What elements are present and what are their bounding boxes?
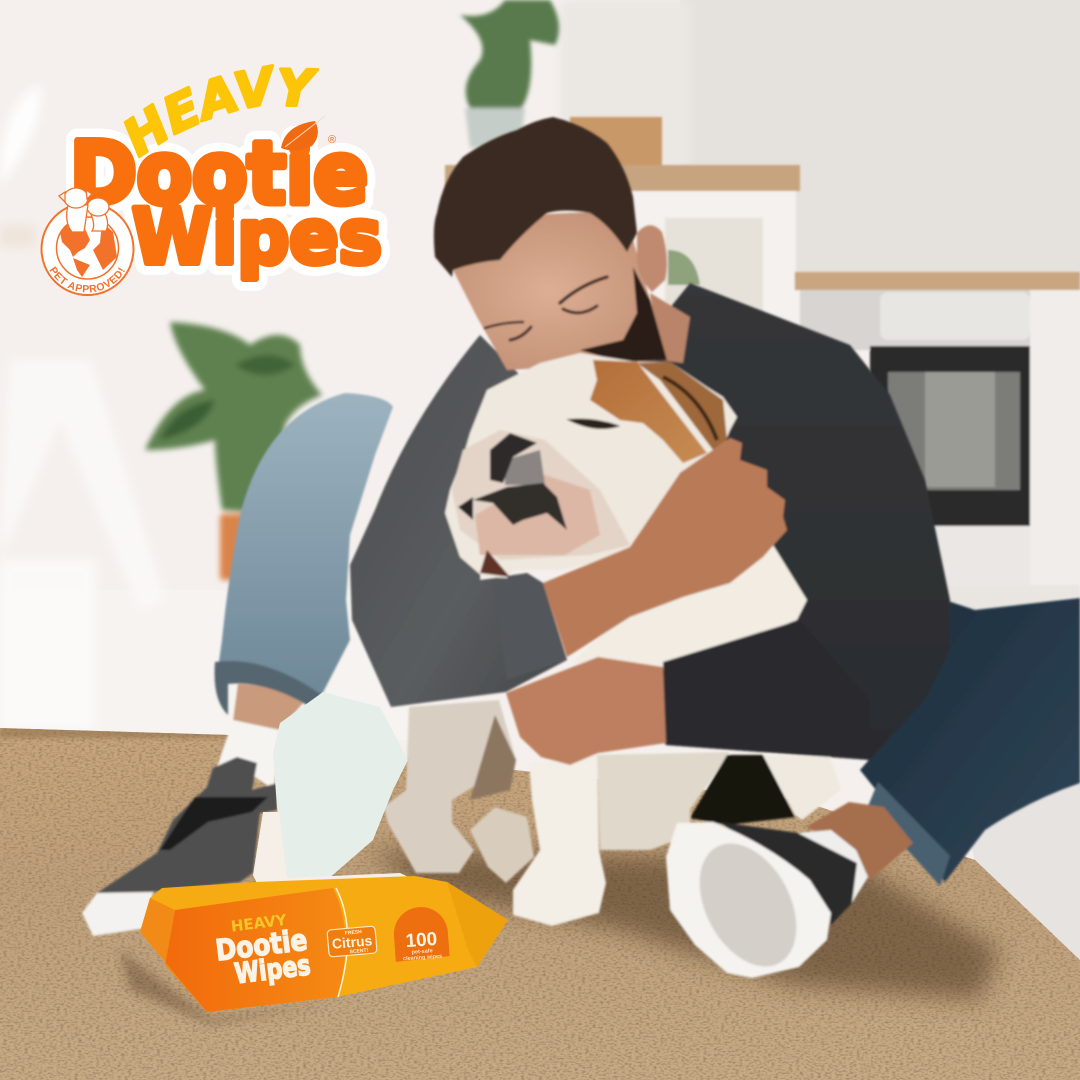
dog: second paw <box>470 807 534 883</box>
product: citrus badge: FRESH <box>345 929 362 937</box>
dog: ear <box>637 362 727 450</box>
product: package body <box>140 876 508 1012</box>
dog: nose <box>490 433 537 483</box>
logo: globe continents <box>60 222 117 277</box>
man: lower hand on dog chest <box>506 657 666 765</box>
man: face <box>453 212 667 370</box>
product: citrus badge: Citrus <box>331 932 373 952</box>
man: beard <box>580 267 667 362</box>
product: logo on pack: Wipes <box>233 948 312 990</box>
logo: cartoon pets on globe <box>59 188 109 232</box>
background: wooden shelf and white cupboard <box>445 117 800 315</box>
man: right shin and sock <box>798 802 913 903</box>
logo: word Heavy: HEAVY <box>124 64 320 158</box>
man: right jeans leg <box>860 598 1080 886</box>
dog: dark gap <box>690 755 795 825</box>
dog: muzzle <box>452 430 630 560</box>
rug <box>0 720 1080 1080</box>
man: hand hugging dog head <box>543 438 787 657</box>
product: divider line <box>336 888 348 997</box>
dog: pink cheek <box>475 475 600 555</box>
product: wipes package <box>120 812 508 1024</box>
man: ear <box>637 225 667 292</box>
dog: head <box>445 353 737 578</box>
shadow under man and dog on rug <box>370 850 1000 1000</box>
shoe: left sneaker <box>82 757 277 936</box>
product: logo on pack: Dootie <box>214 923 309 968</box>
logo: badge caption: PET APPROVED! <box>50 266 125 292</box>
logo: white outline backing: Dootie <box>70 124 368 224</box>
dog: brown patch <box>590 360 707 463</box>
product: pack left fold <box>140 898 207 1012</box>
man: neck <box>650 293 690 363</box>
shoe: sole <box>666 822 831 978</box>
logo: leaf icon <box>281 116 325 151</box>
product: pack right fold <box>447 882 508 967</box>
man: lower right sleeve <box>663 620 870 760</box>
background: counter, oven and cabinets <box>795 272 1080 625</box>
man: head, beard and hair <box>434 117 667 370</box>
dog: chest <box>570 540 807 670</box>
dog: lips <box>473 483 567 530</box>
logo: white outline backing <box>70 124 382 281</box>
man: eyes and brows <box>485 277 607 340</box>
logo: word Wipes: Wipes <box>132 192 382 281</box>
product: 100 count badge <box>392 905 450 963</box>
logo: Heavy Dootie Wipes <box>40 64 390 296</box>
product: logo on pack <box>212 909 312 992</box>
floor: bottom right <box>960 780 1080 965</box>
subject: man and dog <box>82 117 1080 983</box>
dog: mouth <box>480 550 510 577</box>
background: potted plant left <box>145 322 322 580</box>
product: package shadow <box>120 950 330 1024</box>
shoe: right sneaker <box>666 822 857 983</box>
man: left jeans leg <box>215 393 393 715</box>
dog: closed eye <box>570 420 617 428</box>
dog: rear and front legs <box>384 700 841 926</box>
logo: registered mark: ® <box>328 134 336 146</box>
man: sleeve cuff <box>492 573 567 680</box>
shoe: tread <box>680 827 816 983</box>
product: citrus badge <box>327 926 377 957</box>
product: 100 count badge: cleaning wipes <box>403 954 442 962</box>
logo: word Dootie: Dootie <box>70 124 368 224</box>
product: 100 count badge: 100 <box>405 929 438 952</box>
product: orange panel <box>165 888 345 1012</box>
product: package lid <box>253 812 415 890</box>
dog: belly <box>597 752 730 850</box>
dog: grey nose bridge <box>505 450 545 485</box>
logo: pet approved badge <box>40 188 134 296</box>
man: hair <box>434 117 637 277</box>
man: left shin and sock <box>217 684 303 790</box>
dog: front leg and paw <box>513 755 606 926</box>
dog: rear leg left <box>384 700 516 873</box>
product: 100 count badge: pet-safe <box>411 948 433 956</box>
background: stool and blurred white furniture <box>0 85 165 730</box>
shoe: upper <box>720 822 857 925</box>
man: sweater left arm <box>350 335 567 707</box>
man: sweater body <box>600 283 950 760</box>
background: potted plant on shelf <box>460 0 559 148</box>
product: citrus badge: SCENT! <box>349 948 369 955</box>
product: logo on pack: HEAVY <box>230 911 289 936</box>
dog: rear leg right <box>763 755 841 820</box>
dog: head outline <box>445 353 737 578</box>
logo: white outline backing: Wipes <box>132 192 382 281</box>
dog: shaded thigh <box>470 715 516 800</box>
man: sweater torso and arms <box>350 283 950 760</box>
wipe: pulled from pack <box>273 692 408 883</box>
